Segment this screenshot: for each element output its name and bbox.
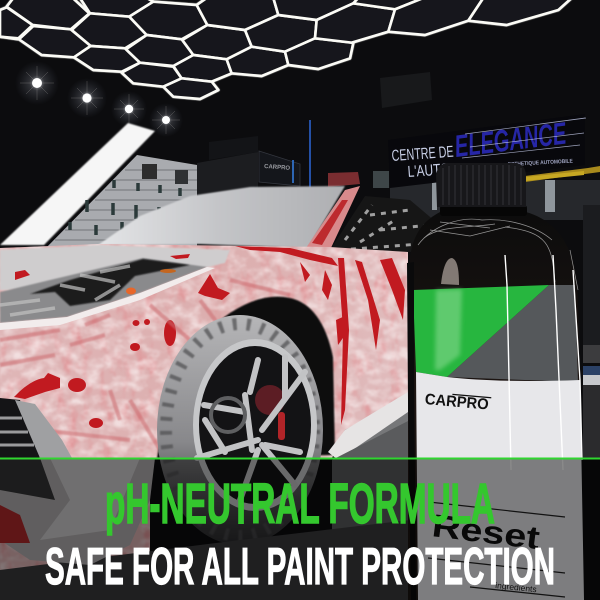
car: hood foam	[0, 245, 230, 290]
bottle: window reflection	[441, 258, 459, 285]
car: side window	[306, 186, 436, 252]
car: windshield	[98, 186, 345, 248]
illuminated sign: Centre de l'Auto Elegance: L'AUTO	[407, 161, 450, 181]
illuminated sign: Centre de l'Auto Elegance: CENTRE DE	[391, 144, 454, 165]
bottle: ingredients text: ingredients	[495, 580, 537, 594]
car: wheel rim and spokes	[197, 346, 311, 504]
hexagon ceiling lights	[0, 0, 572, 99]
ground and lower bumper foam	[0, 420, 410, 600]
car: headlight	[0, 258, 215, 330]
green divider line	[0, 458, 600, 460]
illuminated sign: Centre de l'Auto Elegance	[388, 114, 600, 188]
car: sill	[328, 392, 408, 460]
ceiling spotlights	[15, 61, 183, 137]
bottle: cap	[436, 163, 526, 207]
bottle: label rule lines	[428, 502, 565, 597]
slatwall with products	[44, 120, 389, 250]
light panel on wall	[0, 123, 155, 245]
bottle: neck	[440, 205, 527, 216]
car: front grille	[0, 398, 72, 458]
car: foam-covered body	[0, 240, 410, 600]
bottle: green highlight	[435, 289, 462, 370]
car: red paint patches	[14, 246, 405, 428]
slatwall with products: CARPRO	[264, 164, 291, 172]
bottle: label green section	[413, 285, 549, 377]
bottle: label grey section	[447, 285, 578, 382]
bottle: label white section	[416, 372, 584, 600]
car: wheel arch	[157, 297, 335, 458]
car: tyre	[157, 315, 323, 545]
bottle: CARPRO logo: CARPRO	[424, 391, 489, 414]
product bottle	[407, 163, 584, 600]
bottle: Reset product name: Reset	[430, 507, 542, 556]
bottle: shoulder reflections	[418, 219, 578, 290]
bottle: vertical highlights	[505, 255, 582, 470]
illuminated sign: Centre de l'Auto Elegance: ESTHETIQUE AUTOMOBILE	[508, 159, 573, 168]
bottle: dark glass body	[408, 212, 584, 600]
bottle: left edge	[407, 262, 416, 600]
car: pale red streaks in foam	[0, 280, 290, 450]
caption band overlay	[0, 458, 600, 600]
